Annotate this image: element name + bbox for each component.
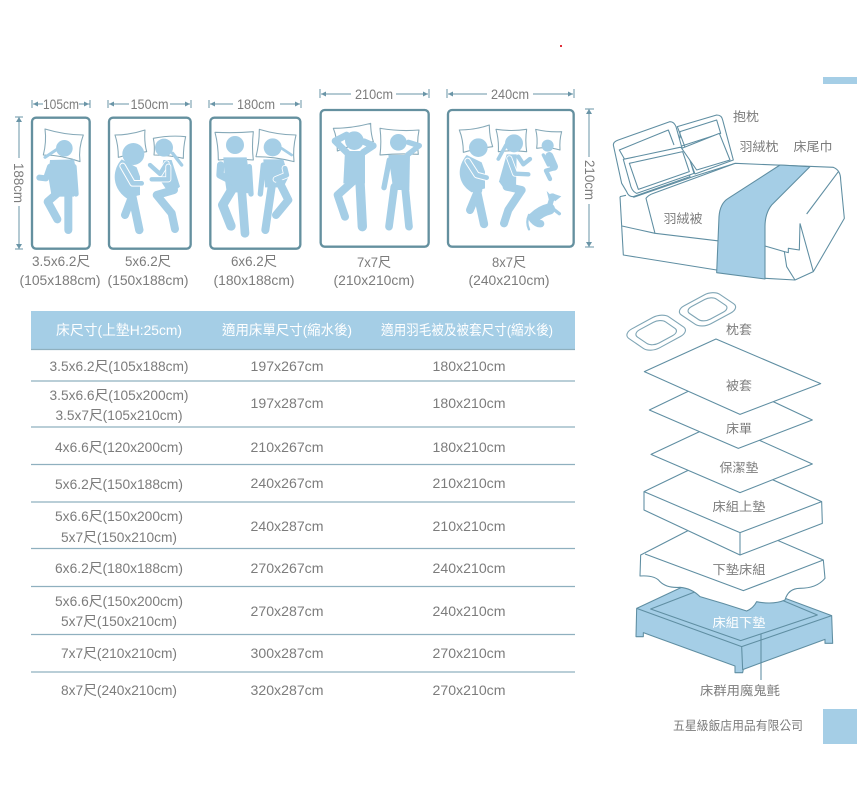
bed 5x6.2 [108, 96, 191, 249]
skirted mattress layer [640, 515, 825, 611]
bed width dimension: 180cm [237, 96, 275, 112]
layer labels: 床群用魔鬼氈 [700, 683, 781, 698]
pillow cases [622, 290, 740, 353]
row 2: 197x287cm [250, 395, 324, 411]
row 2: 3.5x6.6尺(105x200cm) [50, 387, 188, 403]
row 4: 210x210cm [432, 475, 506, 491]
bed height dimension 188cm [11, 117, 27, 249]
base mattress [636, 572, 833, 680]
row 6 [55, 560, 506, 576]
bed size captions [20, 253, 550, 288]
bed width dimension: 150cm [130, 96, 168, 112]
row 1 [50, 358, 506, 374]
bed size captions: 3.5x6.2尺 [32, 253, 90, 269]
duvet cover [644, 339, 821, 414]
row 9: 8x7尺(240x210cm) [61, 682, 177, 698]
bed size captions: 7x7尺 [357, 254, 391, 270]
bed size captions: (150x188cm) [108, 272, 188, 288]
row 5 [55, 508, 506, 545]
bed size captions: 8x7尺 [492, 254, 526, 270]
row 3 [55, 439, 506, 455]
row 9 [61, 682, 506, 698]
layer labels: 保潔墊 [720, 461, 759, 475]
bed width dimension [320, 86, 429, 102]
row 6: 270x267cm [250, 560, 324, 576]
bed height dimension 210cm [582, 109, 598, 247]
row 9: 320x287cm [250, 682, 324, 698]
label: duvet: 羽絨被 [664, 211, 703, 226]
row 8 [61, 645, 506, 661]
mattress topper [644, 456, 822, 555]
row 8: 7x7尺(210x210cm) [61, 645, 177, 661]
row 4: 5x6.2尺(150x188cm) [55, 476, 183, 492]
row 3: 210x267cm [250, 439, 324, 455]
row 8: 300x287cm [250, 645, 324, 661]
layer labels: 床單 [726, 422, 752, 436]
bed size captions: 5x6.2尺 [125, 253, 171, 269]
table header: 適用床單尺寸(縮水後) [222, 322, 352, 338]
panel: size table [31, 311, 575, 698]
illustration: exploded bedding layers [622, 290, 833, 698]
table row dividers [31, 350, 575, 672]
row 8: 270x210cm [432, 645, 506, 661]
label: down pillow: 羽絨枕 [740, 139, 779, 154]
label: throw pillow: 抱枕 [733, 109, 760, 124]
flat sheet [649, 376, 812, 448]
row 4: 240x267cm [250, 475, 324, 491]
company name: 五星級飯店用品有限公司 [673, 718, 803, 733]
row 5: 210x210cm [432, 518, 506, 534]
table header: 適用羽毛被及被套尺寸(縮水後) [381, 322, 553, 338]
bed size captions: (180x188cm) [214, 272, 294, 288]
mattress protector [651, 422, 812, 493]
bed width dimension: 240cm [491, 86, 529, 102]
bed size captions: (240x210cm) [468, 272, 550, 288]
bed width dimension: 210cm [355, 86, 393, 102]
label: bed runner: 床尾巾 [794, 140, 832, 154]
layer labels: 枕套 [726, 322, 753, 337]
bed 3.5x6.2 [32, 96, 90, 249]
illustration: made-up bed [613, 109, 844, 280]
row 3: 4x6.6尺(120x200cm) [55, 439, 183, 455]
bed width dimension: 105cm [43, 96, 79, 112]
bed width dimension [108, 96, 191, 112]
row 6: 6x6.2尺(180x188cm) [55, 560, 183, 576]
bed height dimension 210cm: 210cm [582, 160, 598, 200]
bed 7x7 [320, 86, 429, 247]
table header [31, 311, 575, 349]
row 5: 5x7尺(150x210cm) [61, 529, 177, 545]
layer labels [700, 322, 781, 698]
row 1: 3.5x6.2尺(105x188cm) [50, 358, 188, 374]
bed 8x7 [447, 86, 574, 247]
row 7 [55, 593, 506, 629]
row 2: 180x210cm [432, 395, 506, 411]
row 7: 5x6.6尺(150x200cm) [55, 593, 183, 609]
layer labels: 下墊床組 [712, 563, 766, 577]
row 3: 180x210cm [432, 439, 506, 455]
row 2: 3.5x7尺(105x210cm) [56, 407, 182, 423]
layer labels: 床組上墊 [712, 500, 766, 514]
bed width dimension [447, 86, 574, 102]
row 7: 5x7尺(150x210cm) [61, 613, 177, 629]
row 6: 240x210cm [432, 560, 506, 576]
row 7: 270x287cm [250, 603, 324, 619]
bed width dimension [209, 96, 301, 112]
row 5: 5x6.6尺(150x200cm) [55, 508, 183, 524]
row 1: 180x210cm [432, 358, 506, 374]
dog [527, 191, 561, 229]
top accent bar [823, 77, 857, 84]
row 5: 240x287cm [250, 518, 324, 534]
row 9: 270x210cm [432, 682, 506, 698]
red dot [560, 45, 562, 47]
panel: bed size diagrams [11, 86, 598, 288]
bed size captions: 6x6.2尺 [231, 253, 277, 269]
bed size captions: (210x210cm) [334, 272, 414, 288]
bed height dimension 188cm: 188cm [11, 163, 27, 203]
table header: 床尺寸(上墊H:25cm) [56, 322, 182, 338]
row 4 [55, 475, 506, 492]
row 2 [50, 387, 506, 423]
bed 6x6.2 [209, 96, 301, 249]
row 1: 197x267cm [250, 358, 324, 374]
layer labels: 被套 [726, 378, 753, 393]
bed size captions: (105x188cm) [20, 272, 100, 288]
bottom accent block [823, 709, 857, 744]
row 7: 240x210cm [432, 603, 506, 619]
layer labels: 床組下墊 [712, 616, 766, 630]
